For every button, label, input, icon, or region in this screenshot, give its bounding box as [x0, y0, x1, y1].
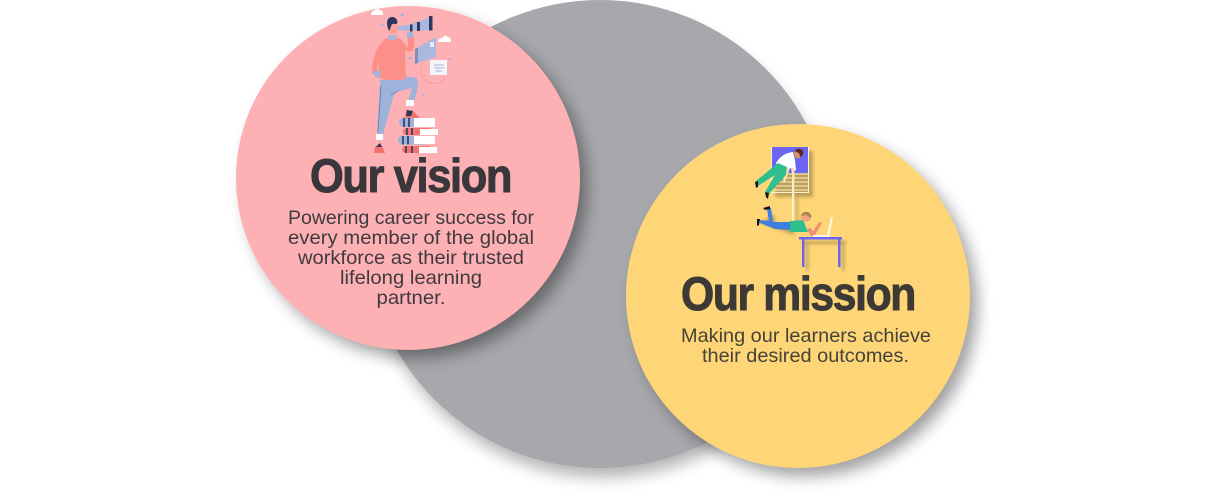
cuffs — [376, 100, 414, 140]
book panel — [415, 37, 436, 64]
icon: people climbing to laptop — [755, 147, 846, 271]
text block: vision statement: lifelong learning — [340, 267, 482, 289]
rope — [792, 172, 794, 224]
climbing person — [776, 152, 796, 171]
heading: our vision: Our vision — [310, 149, 511, 202]
text block: mission statement: their desired outcomes. — [702, 345, 909, 367]
hand — [407, 32, 413, 38]
panel: mission circle — [626, 124, 977, 476]
icon: person with telescope on books — [371, 9, 451, 153]
desk — [799, 237, 842, 240]
text block: vision statement: workforce as their trusted — [297, 247, 524, 269]
text block: vision statement: every member of the global — [288, 227, 534, 249]
grey background circle — [366, 0, 835, 477]
panel: vision circle — [236, 6, 587, 358]
decorative dashed ring — [420, 62, 445, 84]
clouds — [371, 9, 383, 15]
heading: our mission: Our mission — [681, 267, 915, 320]
sparkle dots — [381, 13, 451, 96]
note card — [430, 60, 447, 75]
lying person — [760, 208, 790, 230]
telescope — [398, 17, 432, 31]
icon shadow — [761, 151, 846, 271]
legs — [377, 76, 418, 135]
text block: mission statement: Making our learners achieve — [681, 325, 931, 347]
text block: vision statement: Powering career success for — [288, 207, 534, 229]
text block: mission statement — [681, 325, 931, 367]
text block: vision statement: partner. — [376, 287, 446, 309]
blinds — [771, 147, 809, 193]
head and hair — [388, 22, 398, 34]
collar — [388, 35, 397, 40]
cuff of sleeve — [373, 70, 381, 78]
shoes — [374, 143, 385, 153]
laptop — [813, 217, 833, 237]
books — [399, 118, 429, 127]
torso — [372, 36, 414, 80]
text block: vision statement — [288, 207, 534, 309]
window — [771, 147, 809, 173]
